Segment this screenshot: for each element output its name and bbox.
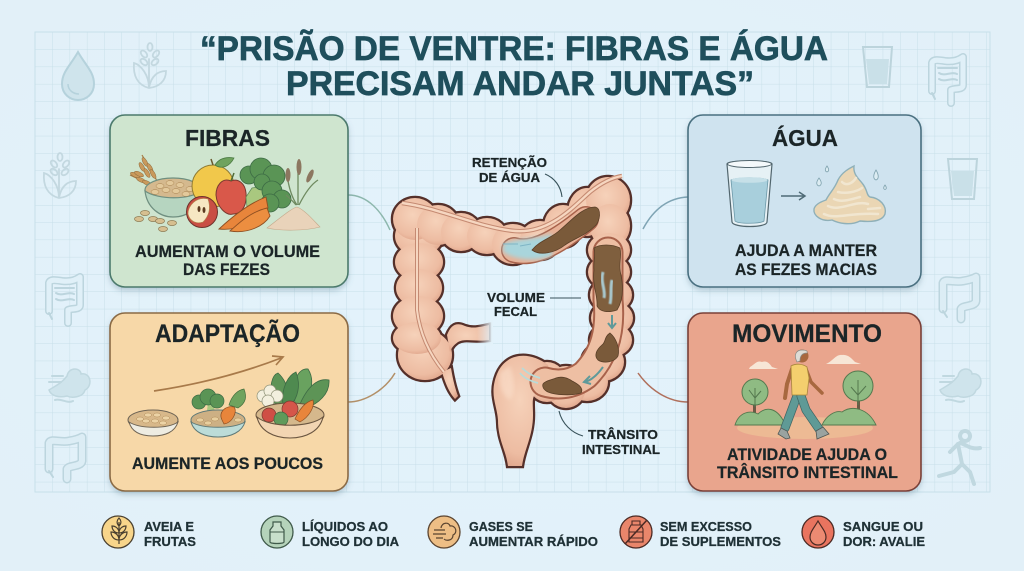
tip: sangue ou dor: SANGUE OU	[843, 519, 923, 534]
heading: adaptacao: ADAPTAÇÃO	[155, 318, 300, 348]
label: retencao de agua: RETENÇÃO	[472, 155, 547, 170]
label: transito intestinal: INTESTINAL	[582, 442, 660, 457]
stool: descending colon	[594, 245, 622, 312]
tip: aveia e frutas: AVEIA E	[144, 519, 194, 534]
tip: sangue ou dor: DOR: AVALIE	[843, 534, 925, 549]
label: transito intestinal	[559, 411, 660, 457]
illustration: person walking in park	[735, 350, 876, 439]
panel: fibras	[110, 115, 348, 287]
icon: grain	[102, 516, 134, 548]
arrow: water softens stool	[781, 192, 805, 200]
label: retencao de agua	[472, 155, 562, 197]
icon: gas cloud	[428, 516, 460, 548]
colon lumen	[514, 219, 609, 384]
tip: aveia e frutas: FRUTAS	[144, 534, 196, 549]
label: transito intestinal: TRÂNSITO	[588, 427, 658, 442]
arrow: gradual increase	[154, 356, 283, 391]
tip: liquidos ao longo do dia	[261, 516, 400, 549]
illustration: large bowl	[256, 369, 329, 438]
connector: movimento to colon	[638, 373, 688, 402]
colon tenia bands	[402, 176, 622, 372]
icon: bottle	[261, 516, 293, 548]
connector: agua to colon	[643, 197, 688, 229]
illustration: medium bowl	[191, 389, 246, 437]
heading: fibras: FIBRAS	[185, 125, 270, 151]
tip: gases: GASES SE	[469, 519, 533, 534]
illustration: glass of water	[727, 160, 772, 226]
caption: fibras: DAS FEZES	[183, 261, 270, 279]
caption: fibras	[135, 243, 320, 279]
connector: fibras to colon	[348, 195, 390, 230]
caption: movimento: ATIVIDADE AJUDA O	[727, 446, 887, 464]
illustration: colon	[393, 176, 633, 466]
illustration: small bowl	[128, 410, 178, 436]
highlights	[499, 366, 514, 400]
title: “PRISÃO DE VENTRE: FIBRAS E ÁGUA	[200, 30, 828, 68]
water retention area	[503, 234, 552, 259]
illustration: fibre foods	[130, 155, 320, 232]
transit arrows	[503, 244, 616, 384]
stool: transverse colon	[532, 207, 600, 253]
label: volume fecal: VOLUME	[487, 290, 545, 305]
caption: agua: AS FEZES MACIAS	[735, 261, 877, 279]
caption: adaptacao: AUMENTE AOS POUCOS	[132, 455, 323, 473]
heading: movimento: MOVIMENTO	[732, 320, 882, 348]
caption: agua	[735, 242, 877, 279]
tip: sem excesso de suplementos: SEM EXCESSO	[660, 519, 752, 534]
tip: sangue ou dor	[802, 516, 925, 549]
tip: sem excesso de suplementos	[620, 516, 781, 549]
stool: lower descending	[596, 333, 619, 362]
caption: movimento: TRÂNSITO INTESTINAL	[717, 463, 898, 482]
connector: adaptacao to colon	[348, 373, 395, 402]
label: volume fecal: FECAL	[494, 304, 537, 319]
panel: agua	[688, 115, 921, 287]
tip: gases: AUMENTAR RÁPIDO	[469, 534, 598, 549]
tip: liquidos ao longo do dia: LONGO DO DIA	[302, 534, 400, 549]
tip: liquidos ao longo do dia: LÍQUIDOS AO	[302, 519, 388, 534]
icon: blood drop	[802, 516, 834, 548]
tip: aveia e frutas	[102, 516, 196, 549]
label: volume fecal	[487, 290, 581, 319]
tip: gases	[428, 516, 598, 549]
ileum fade	[477, 320, 493, 346]
panel: adaptacao	[110, 313, 348, 491]
background watermark icons	[44, 43, 981, 484]
title	[200, 30, 828, 103]
caption: movimento	[717, 446, 898, 482]
title: PRECISAM ANDAR JUNTAS”	[286, 65, 754, 103]
illustration: soft stool	[814, 166, 886, 224]
stool: sigmoid	[543, 377, 582, 395]
label: retencao de agua: DE ÁGUA	[479, 170, 541, 185]
tip: sem excesso de suplementos: DE SUPLEMENTOS	[660, 534, 781, 549]
caption: fibras: AUMENTAM O VOLUME	[135, 243, 320, 261]
panel: movimento	[688, 313, 921, 491]
caption: agua: AJUDA A MANTER	[735, 242, 877, 260]
heading: agua: ÁGUA	[772, 124, 838, 151]
icon: no supplements	[620, 516, 652, 548]
